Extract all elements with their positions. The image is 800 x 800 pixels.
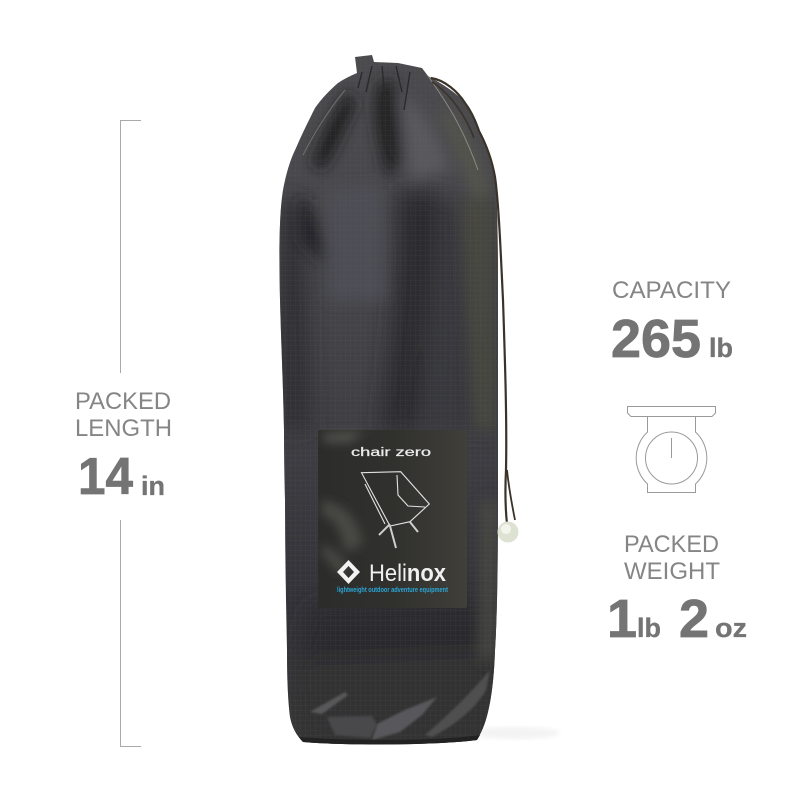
packed weight label: WEIGHT [624,558,720,585]
product: stuff sack [279,55,560,745]
icon: weighing scale [628,406,716,492]
packed weight label [607,531,747,649]
packed weight label: 2 [679,589,709,649]
capacity label: 265 [611,309,701,369]
packed weight label: PACKED [624,531,719,558]
product label patch [318,430,467,608]
Helinox wordmark: Helinox [369,560,447,587]
shading and folds [280,78,500,745]
packed weight label: 1 [607,589,637,649]
ground shadow [470,727,560,739]
packed weight label: lb [637,613,661,643]
bottom creases [299,670,490,744]
drawstring cord [431,78,515,524]
packed length label: LENGTH [75,415,172,442]
packed length label [75,388,172,506]
label sheen [322,431,365,575]
capacity label: CAPACITY [612,277,731,304]
packed length label: in [141,471,165,501]
packed length label: 14 [78,448,133,506]
capacity label: lb [709,333,733,363]
packed length label: PACKED [75,388,171,415]
label name: chair zero [351,447,431,459]
bag body [279,55,498,744]
seam and neck gathers [428,76,478,170]
packed length dimension line [120,120,141,746]
tagline: lightweight outdoor adventure equipment [337,587,449,594]
infographic canvas [76,55,746,747]
Helinox diamond logo [337,560,360,584]
packed weight label: oz [715,613,747,643]
capacity label [611,277,733,369]
cord lock bead [498,522,518,542]
chair line drawing [362,472,429,548]
ripstop texture [279,55,498,744]
